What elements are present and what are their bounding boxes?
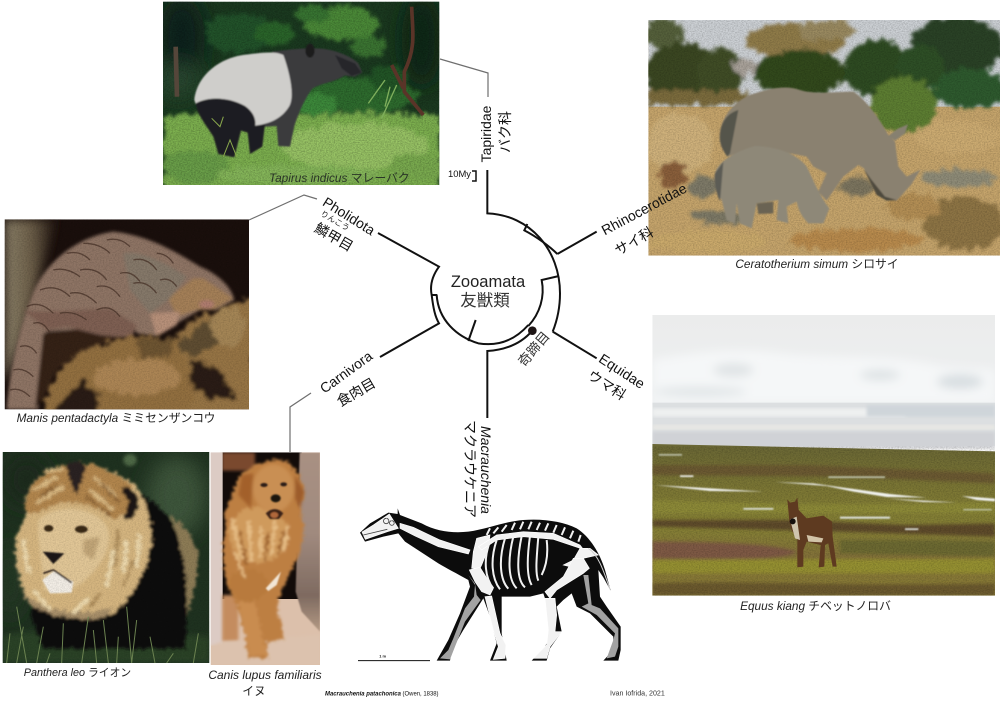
icon: kiang: [787, 498, 837, 567]
caption: Panthera leo: Panthera leo ライオン: [24, 666, 131, 679]
scale bar: [358, 659, 430, 662]
label: Carnivora: Carnivora: [317, 348, 375, 396]
skeleton: Macrauchenia patachonica: 1 m: [379, 654, 387, 659]
label: Equidae: ウマ科: [585, 367, 629, 403]
leader line: pangolin: [249, 195, 317, 220]
credit: author: Ivan Iofrida, 2021: [610, 690, 665, 698]
leader line: dog: [290, 393, 311, 452]
phylogenetic tree: Zooamata: [378, 170, 597, 418]
label: Pholidota: [312, 194, 378, 254]
skeleton: Macrauchenia patachonica: [358, 508, 621, 661]
center label: Zooamata: Zooamata: [451, 273, 526, 291]
caption: Equus kiang: Equus kiang チベットノロバ: [740, 599, 891, 613]
photo: Malayan tapir: [155, 0, 442, 193]
scale bar: 10 My: 10My: [448, 169, 471, 180]
label: Pholidota: 鱗甲目: [312, 220, 356, 254]
photo: white rhinoceros: [643, 17, 1000, 256]
label: Tapiridae: Tapiridae: [478, 105, 494, 162]
label: Macrauchenia: [462, 420, 494, 518]
label: Macrauchenia: マクラウケニア: [462, 420, 478, 518]
node marker: [528, 326, 537, 335]
photo: Tibetan mastiff dog: [211, 452, 320, 665]
near-side bones: [362, 514, 598, 659]
label: Tapiridae: バク科: [497, 111, 513, 153]
label: Equidae: [585, 350, 648, 403]
label: Perissodactyla: 奇蹄目: [514, 328, 553, 369]
caption: Ceratotherium simum: Ceratotherium simum シロサイ: [735, 257, 899, 271]
caption: Tapirus indicus: Tapirus indicus マレーバク: [269, 171, 410, 185]
caption: Canis lupus familiaris: Canis lupus familiaris: [208, 668, 322, 682]
label: Macrauchenia: Macrauchenia: [478, 426, 494, 514]
spine processes and ribs: [486, 522, 581, 589]
leader line: tapir: [440, 59, 488, 97]
caption: Manis pentadactyla: Manis pentadactyla ミミセンザンコウ: [17, 411, 215, 425]
label: Rhinocerotidae: Rhinocerotidae: [599, 180, 690, 238]
label: Pholidota: Pholidota: [320, 194, 378, 238]
label: Equidae: Equidae: [596, 350, 648, 392]
label: Rhinocerotidae: サイ科: [612, 224, 656, 258]
silhouette: [360, 508, 621, 661]
photo: lion: [0, 452, 209, 663]
photo: pangolin: [5, 219, 253, 423]
center label: Zooamata: 友獣類: [460, 291, 510, 310]
center label: Zooamata: [451, 273, 526, 310]
far-side limbs: [440, 575, 618, 659]
caption: Canis lupus familiaris: イヌ: [242, 684, 266, 698]
caption: Canis lupus familiaris: [208, 668, 322, 698]
label: Pholidota: りんこう: [319, 209, 351, 233]
label: Carnivora: 食肉目: [334, 375, 378, 409]
skull detail: [363, 518, 394, 535]
photo: kiang on Tibetan steppe: [652, 315, 995, 596]
label: Tapiridae: [478, 105, 513, 162]
credit: species: Macrauchenia patachonica (Owen, 1838): [325, 692, 439, 698]
